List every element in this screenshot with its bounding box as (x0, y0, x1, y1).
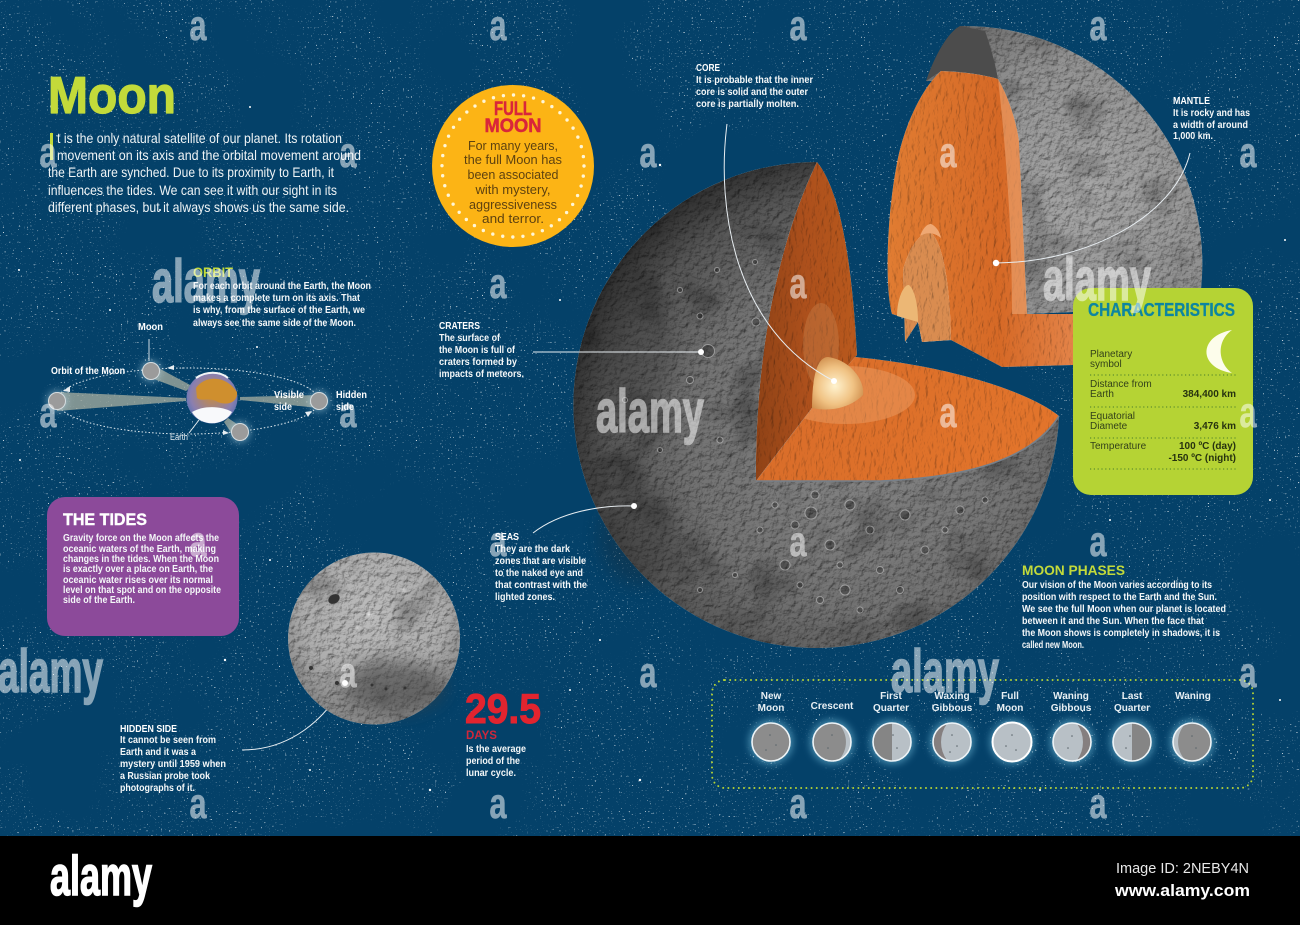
panel: the tides: oceanic water rises over its normal (63, 575, 213, 586)
footer logo: alamy (50, 844, 152, 907)
grey outer surface (926, 26, 1202, 314)
watermarks: a (190, 518, 207, 566)
label: seas (495, 532, 587, 603)
watermarks: a (1240, 129, 1257, 177)
inner core (812, 357, 863, 409)
website: www.alamy.com (1114, 881, 1250, 900)
watermarks: a (340, 389, 357, 437)
table rows: 100 ºC (day) (1179, 441, 1236, 452)
icon: new moon (752, 723, 790, 761)
label: hidden side: It cannot be seen from (120, 735, 216, 746)
table rows (1090, 349, 1236, 469)
watermarks: a (1240, 649, 1257, 697)
watermarks: a (190, 780, 207, 828)
panel: full moon badge: For many years, (468, 138, 558, 153)
floor layer ring (804, 366, 915, 424)
icon: waning gibbous (1053, 723, 1091, 761)
moon phases text block: Our vision of the Moon varies according to its (1022, 580, 1212, 591)
diagram labels (51, 322, 367, 442)
light mantle edge (998, 79, 1027, 314)
moon phases text block: position with respect to the Earth and the Sun. (1022, 592, 1217, 603)
label: core: core is solid and the outer (696, 87, 808, 98)
watermarks: a (490, 260, 507, 308)
phase labels: Waning (1053, 691, 1089, 702)
stat: lunar cycle: Is the average (466, 744, 526, 755)
inner layers (903, 232, 951, 342)
diagram labels: Hidden (336, 390, 367, 401)
orange floor (756, 357, 1059, 481)
panel: full moon badge: MOON (484, 116, 542, 137)
orbit text block (193, 264, 371, 329)
illustration: back half of the moon cutaway (888, 26, 1202, 367)
stat: lunar cycle: lunar cycle. (466, 768, 516, 779)
label: hidden side: mystery until 1959 when (120, 759, 226, 770)
moons on orbit (47, 361, 329, 442)
label: craters: craters formed by (439, 357, 517, 368)
icon: full moon (992, 722, 1032, 762)
phase labels: Moon (997, 703, 1023, 714)
panel: moon phases strip (712, 680, 1253, 788)
orbit path (57, 368, 319, 434)
orbit text block: makes a complete turn on its axis. That (193, 293, 361, 304)
dark seas (600, 290, 680, 585)
watermarks: a (1090, 2, 1107, 50)
watermarks: a (940, 389, 957, 437)
watermarks: a (790, 780, 807, 828)
orbit text block: For each orbit around the Earth, the Moon (193, 281, 371, 292)
table rows: Equatorial (1090, 411, 1135, 422)
phase labels (758, 691, 1211, 714)
stat: lunar cycle: DAYS (466, 728, 497, 742)
stat: lunar cycle (465, 685, 541, 779)
label: core: core is partially molten. (696, 99, 799, 110)
icon: crescent moon symbol (1206, 330, 1232, 373)
watermarks: a (940, 129, 957, 177)
label: craters (439, 321, 524, 380)
panel: full moon badge: the full Moon has (464, 152, 562, 167)
craters (622, 260, 988, 613)
moon phases text block: the Moon shows is completely in shadows, it is (1022, 628, 1220, 639)
diagram labels: side (274, 402, 292, 413)
vertical orange wall (756, 162, 857, 481)
label: craters: the Moon is full of (439, 345, 516, 356)
phase labels: Waning (1175, 691, 1211, 702)
leader lines with dots (242, 124, 1190, 750)
phase labels: Quarter (1114, 703, 1150, 714)
watermarks: alamy (0, 638, 103, 705)
watermarks: a (640, 129, 657, 177)
watermarks: a (40, 389, 57, 437)
table rows: Temperature (1090, 441, 1147, 452)
label: core: It is probable that the inner (696, 75, 813, 86)
orange mantle face (888, 71, 1073, 367)
table rows: Distance from (1090, 379, 1152, 390)
label: hidden side: photographs of it. (120, 783, 195, 794)
watermarks: a (40, 129, 57, 177)
panel: the tides: level on that spot and on the opposite (63, 585, 221, 596)
diagram labels: Orbit of the Moon (51, 366, 125, 377)
phase labels: Crescent (811, 701, 854, 712)
orbit text block: always see the same side of the Moon. (193, 318, 356, 329)
label: hidden side: HIDDEN SIDE (120, 724, 177, 735)
panel: full moon badge: and terror. (482, 211, 544, 226)
icon: waxing gibbous (933, 723, 971, 761)
diagram labels: Earth (170, 432, 188, 442)
label: seas: that contrast with the (495, 580, 587, 591)
watermarks: a (490, 780, 507, 828)
orbit text block: ORBIT (193, 264, 233, 280)
orbit diagram (47, 322, 367, 442)
heading: CHARACTERISTICS (1088, 300, 1235, 320)
panel: the tides: oceanic waters of the Earth, making (63, 544, 216, 555)
phase labels: Gibbous (1051, 703, 1092, 714)
intro text: movement on its axis and the orbital movement around (57, 147, 361, 163)
image id: Image ID: 2NEBY4N (1116, 860, 1249, 877)
intro text: t is the only natural satellite of our planet. Its rotation (57, 130, 342, 146)
phase labels: Last (1122, 691, 1143, 702)
watermarks: a (490, 518, 507, 566)
stat: lunar cycle: period of the (466, 756, 520, 767)
phase labels: New (761, 691, 782, 702)
label: seas: zones that are visible (495, 556, 586, 567)
phase labels: Full (1001, 691, 1019, 702)
panel: characteristics (1073, 288, 1253, 495)
panel: full moon badge: aggressiveness (469, 197, 557, 212)
phase labels: Quarter (873, 703, 909, 714)
panel: full moon badge: been associated (468, 167, 558, 182)
diagram labels: Visible (274, 390, 304, 401)
watermarks: alamy (1043, 246, 1151, 313)
phase labels: Moon (758, 703, 784, 714)
icon: last quarter (1113, 723, 1151, 761)
moon phases text block (1022, 562, 1226, 651)
label: mantle: It is rocky and has (1173, 108, 1250, 119)
label: core: CORE (696, 63, 720, 74)
intro text: influences the tides. We can see it with our sight in its (48, 182, 337, 198)
orbit text block: is why, from the surface of the Earth, we (193, 305, 365, 316)
watermarks: a (790, 518, 807, 566)
dark spots (309, 592, 406, 690)
phase labels: First (880, 691, 903, 702)
label: hidden side: Earth and it was a (120, 747, 196, 758)
diagram labels: side (336, 402, 354, 413)
icon: waning crescent (1173, 723, 1211, 761)
moon phases text block: called new Moon. (1022, 640, 1084, 651)
watermarks: alamy (152, 248, 260, 315)
watermarks: a (640, 649, 657, 697)
label: seas: SEAS (495, 532, 519, 543)
bright rays (357, 588, 406, 629)
leader dot (342, 680, 348, 686)
panel: the tides: Gravity force on the Moon affects the (63, 533, 219, 544)
icon: crescent (813, 723, 851, 761)
wall layer ring (803, 303, 839, 387)
table rows: Earth (1090, 389, 1114, 400)
panel: the tides: is exactly over a place on Earth, the (63, 564, 213, 575)
crust edge (756, 416, 1059, 481)
panel: full moon badge (432, 85, 594, 247)
label: craters: The surface of (439, 333, 501, 344)
watermarks: a (190, 2, 207, 50)
stat: lunar cycle: 29.5 (465, 685, 541, 732)
diagram labels: Moon (138, 322, 163, 333)
table rows: symbol (1090, 359, 1122, 370)
title: Moon (48, 67, 176, 125)
illustration: hidden side of the moon (288, 552, 460, 724)
watermarks: a (340, 649, 357, 697)
panel: full moon badge: with mystery, (474, 182, 550, 197)
table rows: Planetary (1090, 349, 1132, 360)
footer bar (0, 836, 1300, 925)
watermarks: a (790, 260, 807, 308)
moon phases text block: We see the full Moon when our planet is located (1022, 604, 1226, 615)
intro text (48, 130, 361, 215)
watermarks: a (340, 129, 357, 177)
label: mantle: MANTLE (1173, 96, 1210, 107)
earth pointer (189, 420, 199, 433)
intro text: different phases, but it always shows us the same side. (48, 199, 349, 215)
label: hidden side (120, 724, 226, 794)
table rows: 3,476 km (1194, 421, 1236, 432)
phase labels: Waxing (934, 691, 970, 702)
watermarks: a (490, 2, 507, 50)
moon pointer (148, 339, 150, 361)
phase labels: Gibbous (932, 703, 973, 714)
watermarks: a (1240, 389, 1257, 437)
icon: first quarter (873, 723, 911, 761)
watermarks: a (790, 2, 807, 50)
panel: full moon badge: FULL (494, 99, 532, 120)
table rows: 384,400 km (1183, 389, 1236, 400)
watermarks: alamy (596, 378, 704, 445)
illustration: front half of the moon cutaway (573, 162, 1059, 648)
panel: the tides: changes in the tides. When the Moon (63, 554, 219, 565)
label: mantle: a width of around (1173, 120, 1248, 131)
label: seas: to the naked eye and (495, 568, 583, 579)
panel: the tides: THE TIDES (63, 510, 147, 529)
table rows: Diamete (1090, 421, 1128, 432)
label: seas: lighted zones. (495, 592, 555, 603)
table rows: -150 ºC (night) (1168, 453, 1236, 464)
watermarks: alamy (891, 638, 999, 705)
moon phases text block: MOON PHASES (1022, 562, 1125, 578)
dark inner shell (926, 26, 998, 81)
label: seas: They are the dark (495, 544, 570, 555)
panel: the tides: side of the Earth. (63, 595, 135, 606)
visible side beams (57, 364, 319, 434)
phase crater speckles (765, 734, 1197, 753)
intro text: the Earth are synched. Due to its proximity to Earth, it (48, 164, 334, 180)
label: craters: CRATERS (439, 321, 480, 332)
moon phases text block: between it and the Sun. When the face that (1022, 616, 1205, 627)
label: core (696, 63, 813, 110)
dark lower region (340, 660, 444, 712)
label: mantle: 1,000 km. (1173, 131, 1213, 142)
orbit arrows (63, 365, 312, 435)
earth (186, 372, 238, 424)
phase glows (749, 720, 1214, 764)
label: hidden side: a Russian probe took (120, 771, 210, 782)
label: mantle (1173, 96, 1250, 142)
label: craters: impacts of meteors. (439, 369, 524, 380)
grey sphere (573, 162, 1059, 648)
watermarks: a (1090, 780, 1107, 828)
panel: the tides (47, 497, 239, 636)
watermarks: a (1090, 518, 1107, 566)
